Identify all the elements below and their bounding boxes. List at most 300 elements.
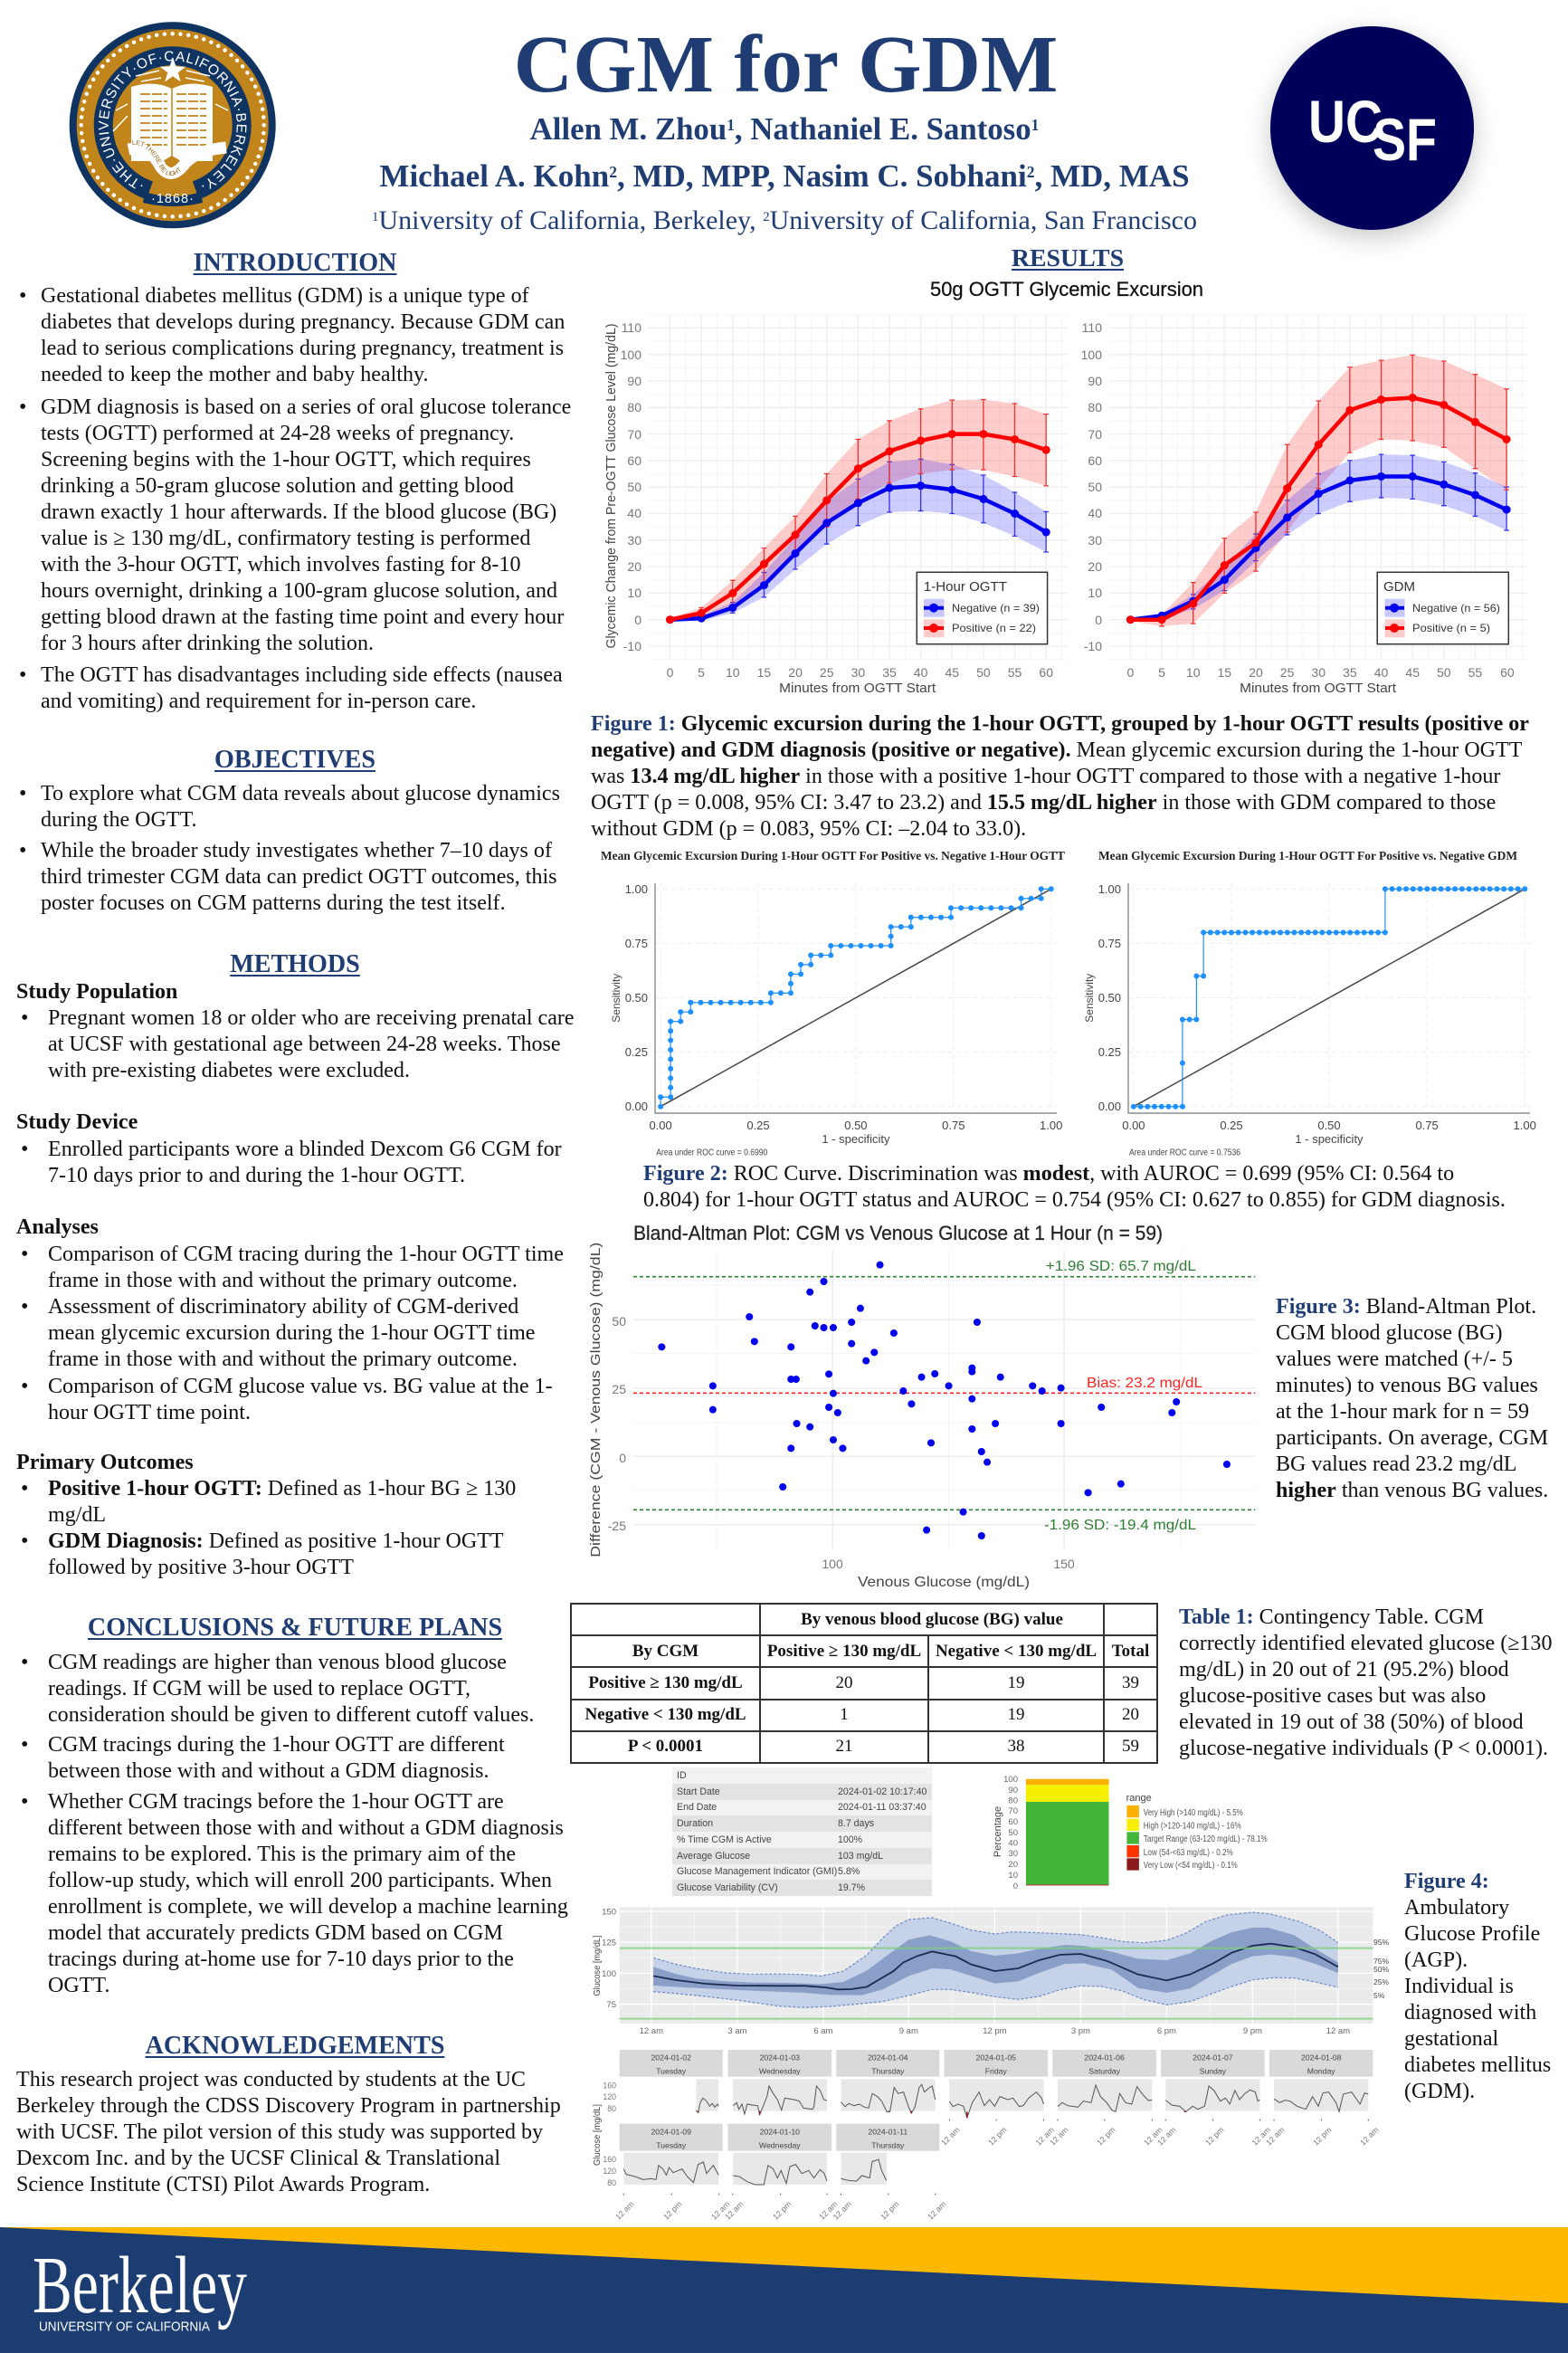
table 1: contingency table: 21 bbox=[836, 1737, 852, 1756]
date and weekday strip labels bbox=[651, 2053, 1342, 2150]
caption: figure 4 bbox=[1404, 1870, 1551, 2103]
text: objective 1: during the OGTT. bbox=[41, 807, 197, 831]
axes labels bbox=[588, 1243, 1075, 1590]
text: GDM diagnosis: drawn exactly 1 hour afterwards. If the blood glucose (BG) bbox=[41, 500, 556, 523]
table 1: contingency table: 38 bbox=[1008, 1737, 1024, 1756]
caption: figure 1: was 13.4 mg/dL higher in those with a positive 1-hour OGTT compared to those with a negative 1-hour bbox=[591, 765, 1500, 788]
table: CGM summary statistics: 2024-01-02 10:17:40 bbox=[838, 1786, 927, 1797]
ROC left plot: 1-hour OGTT: Mean Glycemic Excursion During 1-Hour OGTT For Positive vs. Negative 1-Hour OGTT bbox=[601, 849, 1065, 862]
text: GDM diagnosis bbox=[41, 395, 571, 657]
stacked bar: 90 bbox=[1008, 1786, 1018, 1796]
table 1: contingency table: Total bbox=[1112, 1642, 1149, 1661]
text: GDM diagnosis: GDM diagnosis is based on a series of oral glucose tolerance bbox=[41, 395, 571, 418]
subheading: study device: Study Device bbox=[16, 1110, 138, 1133]
AGP axes and percentile labels: 6 am bbox=[813, 2026, 833, 2036]
chart: ROC curves bbox=[601, 849, 1536, 1158]
daily axes labels: 12 am bbox=[1264, 2125, 1286, 2148]
table 1: contingency table: P < 0.0001 bbox=[628, 1737, 703, 1756]
left plot: 1-hour OGTT: 30 bbox=[627, 533, 641, 548]
date and weekday strip labels: 2024-01-03 bbox=[760, 2053, 800, 2062]
AGP axes and percentile labels: 100 bbox=[602, 1969, 616, 1979]
AGP axes and percentile labels: 75 bbox=[606, 2000, 616, 2010]
daily axes labels: 12 am bbox=[1034, 2125, 1056, 2148]
axes labels: 100 bbox=[822, 1557, 843, 1571]
stacked bar: 80 bbox=[1008, 1796, 1018, 1806]
legend: GDM: GDM bbox=[1383, 580, 1415, 595]
legend: 1-hour OGTT: 1-Hour OGTT bbox=[924, 580, 1007, 595]
date and weekday strip labels: Wednesday bbox=[759, 2141, 801, 2150]
AGP axes and percentile labels: 150 bbox=[602, 1908, 616, 1917]
text: analysis 3: Comparison of CGM glucose value vs. BG value at the 1- bbox=[48, 1374, 553, 1397]
left plot: 1-hour OGTT: 5 bbox=[698, 665, 705, 680]
stacked bar: 40 bbox=[1008, 1839, 1018, 1848]
AGP axes and percentile labels: 12 am bbox=[1326, 2026, 1350, 2036]
daily axes labels: 12 pm bbox=[879, 2199, 900, 2222]
left plot: 1-hour OGTT: 60 bbox=[627, 453, 641, 468]
right plot: GDM: 10 bbox=[1186, 665, 1201, 680]
chart: ambulatory glucose profile bbox=[592, 1908, 1389, 2036]
logo: UC Berkeley seal bbox=[69, 22, 276, 228]
daily axes labels: 12 pm bbox=[1095, 2125, 1117, 2148]
ROC right plot: GDM: 0.00 bbox=[1098, 1100, 1121, 1113]
text: outcome 1: Positive 1-hour OGTT: Defined as 1-hour BG ≥ 130 bbox=[48, 1477, 516, 1500]
caption: figure 3: participants. On average, CGM bbox=[1276, 1426, 1548, 1450]
date and weekday strip labels: Friday bbox=[985, 2067, 1008, 2076]
stacked bar: 0 bbox=[1013, 1881, 1018, 1891]
left plot: 1-hour OGTT: 30 bbox=[851, 665, 865, 680]
AGP axes and percentile labels bbox=[592, 1908, 1389, 2036]
limit annotations: Bias: 23.2 mg/dL bbox=[1087, 1376, 1202, 1391]
heading: introduction: INTRODUCTION bbox=[194, 248, 396, 277]
text: analysis 2 bbox=[48, 1294, 535, 1372]
stacked bar: 20 bbox=[1008, 1860, 1018, 1870]
right plot: GDM: 70 bbox=[1088, 427, 1102, 442]
axes labels: 0 bbox=[619, 1451, 626, 1465]
AGP axes and percentile labels: 25% bbox=[1373, 1977, 1389, 1986]
caption: figure 1: negative) and GDM diagnosis (positive or negative). Mean glycemic excursion during the 1-hour OGTT bbox=[591, 738, 1522, 762]
left plot: 1-hour OGTT: -10 bbox=[623, 639, 641, 653]
caption: table 1: glucose-positive cases but was also bbox=[1179, 1684, 1486, 1708]
text: conclusion 1 bbox=[48, 1649, 534, 1729]
range legend: Very Low (<54 mg/dL) - 0.1% bbox=[1144, 1861, 1238, 1871]
table: CGM summary statistics: Glucose Variability (CV) bbox=[677, 1882, 778, 1893]
range legend: range bbox=[1126, 1793, 1152, 1804]
left plot: 1-hour OGTT: 90 bbox=[627, 374, 641, 388]
left plot: 1-hour OGTT: 15 bbox=[757, 665, 771, 680]
table: CGM summary statistics: Start Date bbox=[677, 1786, 720, 1797]
text: outcome 2 bbox=[48, 1528, 504, 1580]
daily axes labels: 12 am bbox=[709, 2199, 731, 2222]
text: outcome 2: GDM Diagnosis: Defined as positive 1-hour OGTT bbox=[48, 1529, 504, 1553]
daily axes labels: 12 am bbox=[817, 2199, 839, 2222]
panel: objectives bbox=[20, 746, 560, 914]
date and weekday strip labels: Thursday bbox=[871, 2141, 905, 2150]
ROC left plot: 1-hour OGTT: 0.00 bbox=[649, 1119, 672, 1132]
text: conclusion 1: readings. If CGM will be used to replace OGTT, bbox=[48, 1676, 470, 1700]
ROC right plot: GDM: 0.25 bbox=[1098, 1045, 1121, 1059]
ROC right plot: GDM: Area under ROC curve = 0.7536 bbox=[1129, 1148, 1240, 1158]
date and weekday strip labels: 2024-01-02 bbox=[651, 2053, 691, 2062]
ROC right plot: GDM bbox=[1083, 849, 1536, 1158]
authors line 2: Michael A. Kohn2, MD, MPP, Nasim C. Sobhani2, MD, MAS bbox=[379, 158, 1190, 194]
right plot: GDM: 40 bbox=[1088, 506, 1102, 520]
text: GDM definition: lead to serious complications during pregnancy, treatment is bbox=[41, 337, 564, 360]
table 1: contingency table: 1 bbox=[840, 1705, 849, 1724]
caption: table 1 bbox=[1179, 1605, 1552, 1760]
text: GDM definition bbox=[41, 282, 565, 387]
caption: figure 1 bbox=[591, 712, 1529, 841]
caption: figure 4: Individual is bbox=[1404, 1975, 1514, 1998]
daily axes labels: 12 am bbox=[1142, 2125, 1164, 2148]
daily axes labels: 12 pm bbox=[771, 2199, 793, 2222]
range legend: Very High (>140 mg/dL) - 5.5% bbox=[1144, 1808, 1243, 1818]
right plot: GDM: 10 bbox=[1088, 586, 1102, 600]
daily axes labels: 12 am bbox=[613, 2199, 635, 2222]
text: conclusion 3: model that accurately predicts GDM based on CGM bbox=[48, 1920, 503, 1944]
title: CGM for GDM bbox=[514, 18, 1058, 110]
right plot: GDM: 30 bbox=[1311, 665, 1326, 680]
left plot: 1-hour OGTT: 70 bbox=[627, 427, 641, 442]
daily axes labels: 80 bbox=[607, 2178, 616, 2187]
logo: UC Berkeley seal: ·1868· bbox=[151, 192, 195, 206]
table: CGM summary statistics: 100% bbox=[838, 1834, 862, 1845]
caption: figure 2: 0.804) for 1-hour OGTT status and AUROC = 0.754 (95% CI: 0.627 to 0.855) for GDM diagnosis. bbox=[643, 1188, 1506, 1212]
caption: figure 3: CGM blood glucose (BG) bbox=[1276, 1321, 1502, 1345]
ROC right plot: GDM: 1.00 bbox=[1098, 882, 1121, 896]
stacked bar: Percentage bbox=[993, 1806, 1003, 1857]
daily axes labels: 12 pm bbox=[986, 2125, 1008, 2148]
chart: time in range stacked bar bbox=[993, 1775, 1268, 1891]
ROC left plot: 1-hour OGTT: 0.00 bbox=[625, 1100, 648, 1113]
left plot: 1-hour OGTT: 50 bbox=[627, 480, 641, 494]
caption: figure 3: at the 1-hour mark for n = 59 bbox=[1276, 1400, 1529, 1424]
AGP axes and percentile labels: 5% bbox=[1373, 1991, 1385, 2000]
left plot: 1-hour OGTT: 40 bbox=[627, 506, 641, 520]
caption: table 1: mg/dL) in 20 out of 21 (95.2%) blood bbox=[1179, 1658, 1509, 1681]
right plot: GDM: 15 bbox=[1218, 665, 1231, 680]
axes labels: 25 bbox=[612, 1382, 626, 1396]
caption: figure 4: (GDM). bbox=[1404, 2080, 1475, 2103]
axes labels: Venous Glucose (mg/dL) bbox=[858, 1575, 1030, 1590]
AGP axes and percentile labels: Glucose [mg/dL] bbox=[592, 1935, 603, 1996]
ROC right plot: GDM: 1.00 bbox=[1514, 1119, 1536, 1132]
y axis label: Glycemic Change from Pre-OGTT Glucose Level (mg/dL) bbox=[603, 323, 619, 648]
text: analysis 1 bbox=[48, 1242, 564, 1294]
table 1: contingency table: Negative < 130 mg/dL bbox=[584, 1705, 746, 1724]
left plot: 1-hour OGTT: 10 bbox=[627, 586, 641, 600]
right plot: GDM: 100 bbox=[1081, 348, 1102, 362]
heading: methods: METHODS bbox=[230, 950, 360, 977]
daily axes labels: 12 am bbox=[723, 2199, 745, 2222]
table: CGM summary statistics: 8.7 days bbox=[838, 1818, 874, 1829]
logo: UC Berkeley seal: LET THERE BE LIGHT bbox=[132, 140, 181, 176]
date and weekday strip labels: 2024-01-11 bbox=[868, 2127, 908, 2136]
chart: Bland-Altman plot bbox=[588, 1222, 1256, 1590]
text: study population: with pre-existing diabetes were excluded. bbox=[48, 1059, 410, 1082]
right plot: GDM: 60 bbox=[1500, 665, 1515, 680]
range legend bbox=[1126, 1793, 1268, 1871]
left plot: 1-hour OGTT: 35 bbox=[882, 665, 897, 680]
legend: GDM: Negative (n = 56) bbox=[1412, 602, 1500, 614]
text: study device bbox=[48, 1137, 562, 1189]
text: acknowledgements: Dexcom Inc. and by the UCSF Clinical & Translational bbox=[16, 2147, 500, 2170]
right plot: GDM: 40 bbox=[1374, 665, 1388, 680]
right plot: GDM: 110 bbox=[1082, 320, 1102, 335]
legend: 1-hour OGTT bbox=[917, 572, 1048, 644]
caption: figure 3: values were matched (+/- 5 bbox=[1276, 1348, 1513, 1371]
right plot: GDM: 55 bbox=[1468, 665, 1482, 680]
text: conclusion 3: Whether CGM tracings before the 1-hour OGTT are bbox=[48, 1790, 504, 1814]
daily axes labels: Glucose [mg/dL] bbox=[592, 2104, 603, 2166]
date and weekday strip labels: 2024-01-05 bbox=[976, 2053, 1016, 2062]
left plot: 1-hour OGTT: 0 bbox=[634, 613, 641, 627]
caption: figure 3: BG values read 23.2 mg/dL bbox=[1276, 1453, 1516, 1476]
table: CGM summary statistics: 19.7% bbox=[838, 1882, 865, 1893]
text: objective 1: To explore what CGM data reveals about glucose dynamics bbox=[41, 782, 560, 805]
AGP axes and percentile labels: 9 pm bbox=[1243, 2026, 1262, 2036]
date and weekday strip labels: 2024-01-07 bbox=[1193, 2053, 1233, 2062]
text: GDM diagnosis: getting blood drawn at the fasting time point and every hour bbox=[41, 605, 564, 628]
range legend: Target Range (63-120 mg/dL) - 78.1% bbox=[1144, 1834, 1268, 1844]
ROC left plot: 1-hour OGTT: 0.25 bbox=[625, 1045, 648, 1059]
ROC left plot: 1-hour OGTT: Area under ROC curve = 0.6990 bbox=[656, 1148, 768, 1158]
text: analysis 2: mean glycemic excursion during the 1-hour OGTT time bbox=[48, 1321, 535, 1345]
subheading: primary outcomes: Primary Outcomes bbox=[16, 1450, 194, 1473]
stacked bar: 60 bbox=[1008, 1817, 1018, 1827]
table 1: contingency table: By venous blood glucose (BG) value bbox=[801, 1610, 1063, 1629]
ROC left plot: 1-hour OGTT bbox=[601, 849, 1065, 1158]
daily axes labels: 12 pm bbox=[1311, 2125, 1333, 2148]
text: study device: Enrolled participants wore a blinded Dexcom G6 CGM for bbox=[48, 1137, 562, 1160]
AGP axes and percentile labels: 50% bbox=[1373, 1965, 1389, 1974]
left plot: 1-hour OGTT: Minutes from OGTT Start bbox=[779, 681, 936, 696]
caption: figure 4: Glucose Profile bbox=[1404, 1922, 1540, 1946]
daily axes labels: 12 pm bbox=[1203, 2125, 1225, 2148]
ROC right plot: GDM: 0.50 bbox=[1317, 1119, 1341, 1132]
date and weekday strip labels: 2024-01-06 bbox=[1084, 2053, 1125, 2062]
caption: table 1: glucose-negative individuals (P < 0.0001). bbox=[1179, 1737, 1548, 1760]
caption: table 1: elevated in 19 out of 38 (50%) of blood bbox=[1179, 1710, 1524, 1734]
AGP axes and percentile labels: 3 pm bbox=[1071, 2026, 1090, 2036]
date and weekday strip labels: Monday bbox=[1307, 2067, 1335, 2076]
table 1: contingency table: Positive ≥ 130 mg/dL bbox=[767, 1642, 921, 1661]
table 1: contingency table bbox=[570, 1603, 1158, 1764]
text: study device: 7-10 days prior to and during the 1-hour OGTT. bbox=[48, 1164, 465, 1187]
text: OGTT disadvantages: The OGTT has disadvantages including side effects (nausea bbox=[41, 662, 563, 686]
daily axes labels: 120 bbox=[603, 2092, 616, 2101]
text: conclusion 2: CGM tracings during the 1-hour OGTT are different bbox=[48, 1732, 505, 1756]
text: analysis 2: Assessment of discriminatory ability of CGM-derived bbox=[48, 1294, 518, 1318]
table 1: contingency table: 19 bbox=[1008, 1705, 1024, 1724]
text: conclusion 3: follow-up study, which will enroll 200 participants. When bbox=[48, 1868, 552, 1891]
caption: figure 3 bbox=[1276, 1295, 1548, 1502]
text: conclusion 1: consideration should be given to different cutoff values. bbox=[48, 1703, 534, 1727]
text: acknowledgements: Berkeley through the CDSS Discovery Program in partnership bbox=[16, 2094, 561, 2118]
left plot: 1-hour OGTT: 20 bbox=[788, 665, 803, 680]
right plot: GDM: 20 bbox=[1249, 665, 1263, 680]
right plot: GDM bbox=[1081, 315, 1528, 696]
daily axes labels: 12 am bbox=[1358, 2125, 1380, 2148]
subheading: analyses: Analyses bbox=[16, 1215, 99, 1238]
text: acknowledgements bbox=[16, 2067, 561, 2196]
plot title: Bland-Altman Plot: CGM vs Venous Glucose at 1 Hour (n = 59) bbox=[633, 1222, 1163, 1244]
text: conclusion 2: between those with and without a GDM diagnosis. bbox=[48, 1759, 489, 1783]
text: analysis 1: Comparison of CGM tracing during the 1-hour OGTT time bbox=[48, 1242, 564, 1265]
right plot: GDM: 60 bbox=[1088, 453, 1102, 468]
scatter area bbox=[633, 1251, 1255, 1549]
right plot: GDM: Minutes from OGTT Start bbox=[1240, 681, 1397, 696]
table 1: contingency table: 19 bbox=[1008, 1673, 1024, 1692]
ROC left plot: 1-hour OGTT: Sensitivity bbox=[610, 974, 622, 1023]
left plot: 1-hour OGTT: 50 bbox=[976, 665, 991, 680]
Berkeley wordmark: Berkeley bbox=[33, 2241, 247, 2330]
right plot: GDM: 50 bbox=[1088, 480, 1102, 494]
daily axes labels: 12 am bbox=[939, 2125, 961, 2148]
ROC left plot: 1-hour OGTT: 1.00 bbox=[625, 882, 648, 896]
text: objective 1 bbox=[41, 780, 560, 833]
caption: figure 1: OGTT (p = 0.008, 95% CI: 3.47 to 23.2) and 15.5 mg/dL higher in those with GDM compared to those bbox=[591, 791, 1496, 814]
text: analysis 1: frame in those with and without the primary outcome. bbox=[48, 1269, 518, 1292]
daily axes labels: 12 pm bbox=[661, 2199, 683, 2222]
text: GDM diagnosis: with the 3-hour OGTT, which involves fasting for 8-10 bbox=[41, 552, 521, 576]
date and weekday strip labels: Tuesday bbox=[656, 2067, 687, 2076]
ROC right plot: GDM: 0.00 bbox=[1122, 1119, 1145, 1132]
left plot: 1-hour OGTT bbox=[621, 315, 1068, 696]
axes labels: 50 bbox=[612, 1314, 626, 1329]
right plot: GDM: 90 bbox=[1088, 374, 1102, 388]
right plot: GDM: 0 bbox=[1127, 665, 1135, 680]
left plot: 1-hour OGTT: 45 bbox=[946, 665, 959, 680]
ROC left plot: 1-hour OGTT: 0.75 bbox=[625, 937, 648, 950]
date and weekday strip labels: Sunday bbox=[1200, 2067, 1227, 2076]
date and weekday strip labels: 2024-01-10 bbox=[760, 2127, 800, 2136]
caption: figure 4: diabetes mellitus bbox=[1404, 2053, 1551, 2077]
caption: figure 3: Figure 3: Bland-Altman Plot. bbox=[1276, 1295, 1536, 1319]
axes labels: -25 bbox=[608, 1519, 626, 1533]
text: OGTT disadvantages bbox=[41, 662, 563, 715]
right plot: GDM: 30 bbox=[1088, 533, 1102, 548]
panel: conclusions and future plans bbox=[22, 1613, 568, 1996]
table 1: contingency table: Negative < 130 mg/dL bbox=[936, 1642, 1097, 1661]
text: study population: Pregnant women 18 or older who are receiving prenatal care bbox=[48, 1006, 575, 1030]
stacked bar: 100 bbox=[1003, 1775, 1018, 1785]
right plot: GDM: 0 bbox=[1095, 613, 1102, 627]
AGP axes and percentile labels: 95% bbox=[1373, 1938, 1389, 1947]
logo: UCSF bbox=[1270, 26, 1474, 230]
table 1: contingency table: 20 bbox=[836, 1673, 852, 1692]
table 1: contingency table: 39 bbox=[1122, 1673, 1139, 1692]
ROC right plot: GDM: Mean Glycemic Excursion During 1-Hour OGTT For Positive vs. Negative GDM bbox=[1098, 849, 1517, 862]
ROC right plot: GDM: 0.50 bbox=[1098, 991, 1121, 1005]
date and weekday strip labels: Tuesday bbox=[656, 2141, 687, 2150]
caption: figure 2 bbox=[643, 1162, 1506, 1212]
left plot: 1-hour OGTT: 100 bbox=[621, 348, 641, 362]
left plot: 1-hour OGTT: 80 bbox=[627, 400, 641, 414]
limit annotations: -1.96 SD: -19.4 mg/dL bbox=[1044, 1518, 1196, 1533]
text: objective 2 bbox=[41, 838, 557, 916]
right plot: GDM: 20 bbox=[1088, 559, 1102, 574]
ROC right plot: GDM: 0.75 bbox=[1415, 1119, 1439, 1132]
caption: figure 4: gestational bbox=[1404, 2027, 1498, 2051]
AGP axes and percentile labels: 75% bbox=[1373, 1957, 1389, 1966]
table: CGM summary statistics: 2024-01-11 03:37:40 bbox=[838, 1802, 927, 1813]
text: GDM diagnosis: drinking a 50-gram glucose solution and getting blood bbox=[41, 474, 514, 498]
daily axes labels: 12 am bbox=[1155, 2125, 1177, 2148]
left plot: 1-hour OGTT: 60 bbox=[1039, 665, 1053, 680]
legend: GDM: Positive (n = 5) bbox=[1412, 622, 1490, 634]
left plot: 1-hour OGTT: 55 bbox=[1008, 665, 1022, 680]
right plot: GDM: 80 bbox=[1088, 400, 1102, 414]
right plot: GDM: 50 bbox=[1437, 665, 1451, 680]
stacked bar: 50 bbox=[1008, 1828, 1018, 1838]
ROC right plot: GDM: 0.75 bbox=[1098, 937, 1121, 950]
text: conclusion 3 bbox=[48, 1788, 568, 1998]
text: conclusion 3: enrollment is complete, we will develop a machine learning bbox=[48, 1895, 568, 1919]
text: objective 2: poster focuses on CGM patterns during the test itself. bbox=[41, 891, 506, 914]
text: GDM diagnosis: for 3 hours after drinking the solution. bbox=[41, 632, 374, 655]
legend: 1-hour OGTT: Negative (n = 39) bbox=[952, 602, 1040, 614]
range legend: Low (54-<63 mg/dL) - 0.2% bbox=[1144, 1848, 1233, 1858]
chart title: 50g OGTT Glycemic Excursion bbox=[930, 278, 1203, 300]
caption: figure 2: Figure 2: ROC Curve. Discrimination was modest, with AUROC = 0.699 (95% CI: 0.564 to bbox=[643, 1162, 1454, 1186]
left plot: 1-hour OGTT: 25 bbox=[820, 665, 834, 680]
affiliations: 1University of California, Berkeley, 2University of California, San Francisco bbox=[372, 205, 1197, 235]
daily axes labels: 12 am bbox=[1250, 2125, 1272, 2148]
caption: figure 4: Figure 4: bbox=[1404, 1870, 1489, 1893]
text: acknowledgements: with UCSF. The pilot version of this study was supported by bbox=[16, 2120, 543, 2143]
text: conclusion 2 bbox=[48, 1732, 505, 1785]
table: CGM summary statistics: ID bbox=[677, 1770, 687, 1781]
table: CGM summary statistics: End Date bbox=[677, 1802, 717, 1813]
table: CGM summary statistics: 5.8% bbox=[838, 1866, 860, 1877]
caption: table 1: correctly identified elevated glucose (≥130 bbox=[1179, 1632, 1552, 1655]
legend: GDM bbox=[1377, 572, 1508, 644]
ROC right plot: GDM: 1 - specificity bbox=[1295, 1132, 1364, 1146]
daily axes labels: 120 bbox=[603, 2167, 616, 2176]
left plot: 1-hour OGTT: 20 bbox=[627, 559, 641, 574]
right plot: GDM: 5 bbox=[1158, 665, 1165, 680]
text: conclusion 3: tracings during at-home use for 7-10 days prior to the bbox=[48, 1948, 514, 1971]
text: GDM diagnosis: Screening begins with the 1-hour OGTT, which requires bbox=[41, 447, 531, 471]
stacked bar bbox=[993, 1775, 1109, 1891]
text: GDM diagnosis: hours overnight, drinking a 100-gram glucose solution, and bbox=[41, 579, 557, 603]
panel: acknowledgements bbox=[16, 2031, 561, 2196]
date and weekday strip labels: 2024-01-08 bbox=[1301, 2053, 1342, 2062]
date and weekday strip labels: 2024-01-09 bbox=[651, 2127, 691, 2136]
AGP axes and percentile labels: 6 pm bbox=[1157, 2026, 1176, 2036]
caption: figure 4: Ambulatory bbox=[1404, 1896, 1509, 1920]
right plot: GDM: -10 bbox=[1084, 639, 1102, 653]
date and weekday strip labels: Thursday bbox=[871, 2067, 905, 2076]
text: conclusion 3: OGTT. bbox=[48, 1973, 109, 1996]
text: objective 2: While the broader study investigates whether 7–10 days of bbox=[41, 838, 552, 862]
AGP axes and percentile labels: 9 am bbox=[899, 2026, 918, 2036]
heading: conclusions: CONCLUSIONS & FUTURE PLANS bbox=[88, 1613, 502, 1642]
text: GDM definition: diabetes that develops during pregnancy. Because GDM can bbox=[41, 310, 565, 333]
text: analysis 3: hour OGTT time point. bbox=[48, 1401, 251, 1424]
text: GDM definition: Gestational diabetes mellitus (GDM) is a unique type of bbox=[41, 284, 529, 308]
left plot: 1-hour OGTT: 0 bbox=[667, 665, 674, 680]
caption: figure 4: (AGP). bbox=[1404, 1948, 1468, 1972]
AGP axes and percentile labels: 125 bbox=[602, 1939, 616, 1948]
chart: daily glucose small multiples bbox=[592, 2050, 1380, 2222]
subheading: study population: Study Population bbox=[16, 979, 177, 1003]
table: CGM summary statistics: % Time CGM is Active bbox=[677, 1834, 772, 1845]
logo: UCSF: SF bbox=[1373, 106, 1437, 173]
AGP axes and percentile labels: 12 pm bbox=[983, 2026, 1007, 2036]
authors line 1: Allen M. Zhou1, Nathaniel E. Santoso1 bbox=[530, 111, 1039, 147]
panel: methods bbox=[16, 950, 575, 1578]
